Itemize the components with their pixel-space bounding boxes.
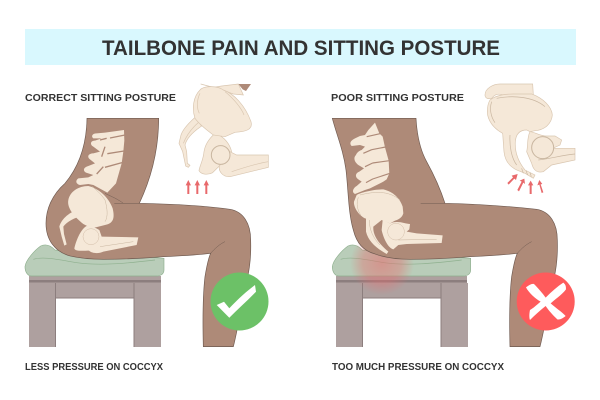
pelvis and femur bones: [59, 186, 138, 253]
arrows: upward pressure: [186, 180, 209, 194]
spine bones: [76, 130, 125, 193]
heading: poor posture: POOR SITTING POSTURE: [331, 92, 464, 104]
inset pelvis diagram: [179, 84, 268, 177]
knee and hip creases: [105, 193, 225, 253]
crease lines: [421, 203, 532, 253]
seat cushion: [25, 245, 164, 276]
chair: [336, 276, 468, 347]
title banner: TAILBONE PAIN AND SITTING POSTURE: [102, 36, 500, 60]
caption: too much pressure: TOO MUCH PRESSURE ON COCCYX: [332, 361, 504, 373]
pelvis and femur bones: [354, 189, 443, 254]
seated body: [46, 118, 251, 347]
heading: correct posture: CORRECT SITTING POSTURE: [25, 92, 176, 104]
panel: poor sitting posture: [331, 84, 575, 373]
caption: less pressure: LESS PRESSURE ON COCCYX: [25, 361, 163, 373]
inset pelvis diagram: [485, 84, 575, 178]
seat cushion: [332, 245, 471, 276]
arrows: pressure on coccyx: [507, 174, 543, 194]
title banner: [25, 29, 576, 65]
chair: [29, 276, 161, 347]
check badge: [210, 272, 268, 330]
panel: correct sitting posture: [25, 84, 269, 373]
spine bones: [350, 123, 390, 194]
pressure glow: [350, 231, 414, 295]
seated body: [332, 118, 557, 347]
cross badge: [517, 272, 575, 330]
